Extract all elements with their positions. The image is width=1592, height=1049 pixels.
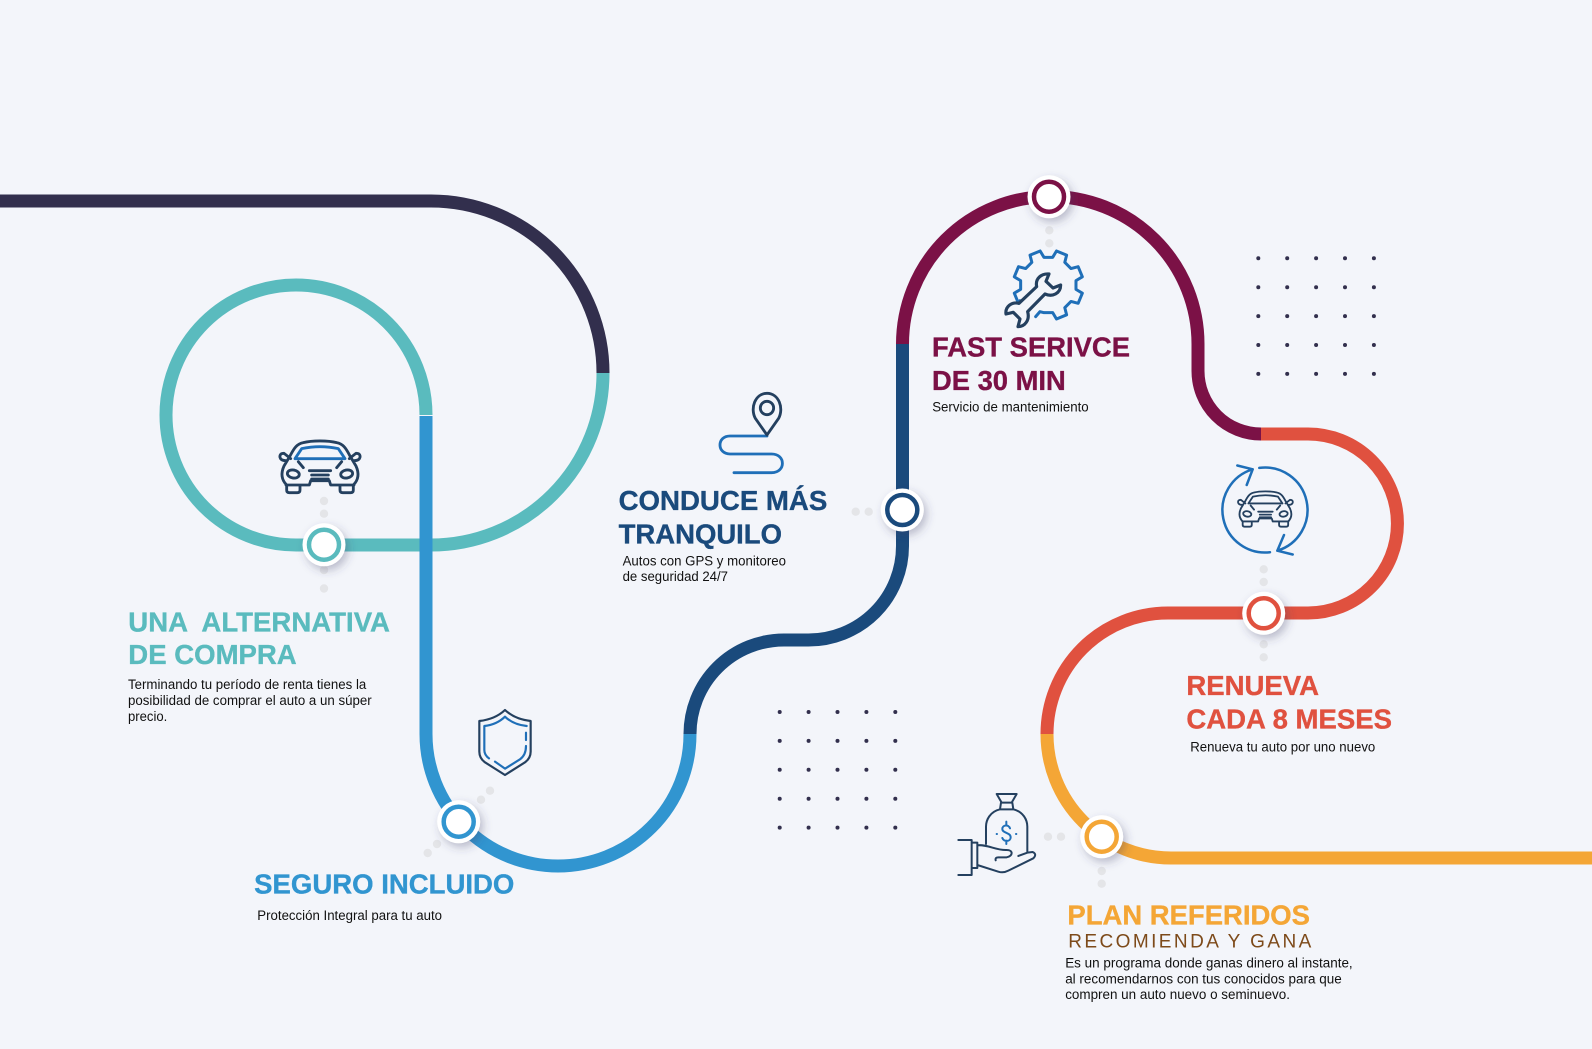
description: de seguridad 24/7: [623, 569, 728, 584]
icon: shield: [479, 710, 531, 775]
node: orange: [1080, 815, 1123, 858]
road segment: teal loop: [166, 285, 603, 545]
road segment: dark start: [0, 201, 603, 373]
icon: car: [280, 441, 360, 493]
icon: map pin and route: [720, 393, 782, 473]
heading: UNA ALTERNATIVA: [128, 607, 390, 638]
heading: DE COMPRA: [128, 639, 297, 670]
subheading: RECOMIENDA Y GANA: [1068, 932, 1312, 953]
heading: RENUEVA: [1186, 670, 1319, 701]
description: al recomendarnos con tus conocidos para que: [1065, 971, 1342, 986]
node: purple: [1028, 175, 1070, 218]
description: Autos con GPS y monitoreo: [623, 553, 786, 568]
description: Servicio de mantenimiento: [932, 400, 1089, 415]
heading: [619, 485, 827, 549]
icon: car with refresh arrows: [1222, 466, 1308, 554]
road segment: orange: [1047, 734, 1592, 858]
description: [1065, 955, 1353, 1002]
icon: hand holding money bag: [958, 794, 1035, 875]
road segment: red: [1047, 434, 1397, 734]
dot grid: lower centre: [778, 710, 897, 830]
text block: Una alternativa de compra: [128, 607, 390, 724]
text block: Conduce más tranquilo: [619, 485, 827, 584]
road segment: blue: [426, 416, 690, 866]
description: Es un programa donde ganas dinero al instante,: [1065, 955, 1353, 970]
text block: Plan referidos: [1065, 899, 1353, 1002]
road segment: navy: [690, 344, 902, 734]
connector dots: [320, 226, 1268, 888]
heading: CADA 8 MESES: [1186, 704, 1392, 735]
node: navy: [881, 488, 924, 532]
road segment: purple: [902, 196, 1261, 434]
heading: PLAN REFERIDOS: [1067, 899, 1310, 930]
description: Protección Integral para tu auto: [257, 908, 442, 923]
node: blue: [437, 800, 480, 843]
description: compren un auto nuevo o seminuevo.: [1065, 987, 1290, 1002]
heading: [128, 607, 390, 670]
heading: SEGURO INCLUIDO: [254, 868, 514, 899]
heading: DE 30 MIN: [932, 365, 1066, 396]
description: [623, 553, 786, 584]
road path: [0, 196, 1592, 866]
text block: Seguro incluido: [254, 868, 514, 923]
text block: Fast service: [932, 332, 1130, 415]
description: [128, 677, 372, 724]
dot grid: upper right: [1256, 256, 1376, 376]
node: red: [1242, 592, 1285, 635]
heading: [932, 332, 1130, 396]
heading: [1186, 670, 1392, 735]
heading: FAST SERIVCE: [932, 332, 1130, 363]
text block: Renueva: [1186, 670, 1392, 755]
description: posibilidad de comprar el auto a un súper: [128, 693, 372, 708]
heading: CONDUCE MÁS: [619, 485, 827, 516]
icon: gear and wrench: [1006, 251, 1082, 327]
description: Renueva tu auto por uno nuevo: [1190, 740, 1375, 755]
description: Terminando tu período de renta tienes la: [128, 677, 367, 692]
description: precio.: [128, 709, 167, 724]
node: teal: [302, 523, 346, 566]
heading: TRANQUILO: [619, 518, 782, 549]
